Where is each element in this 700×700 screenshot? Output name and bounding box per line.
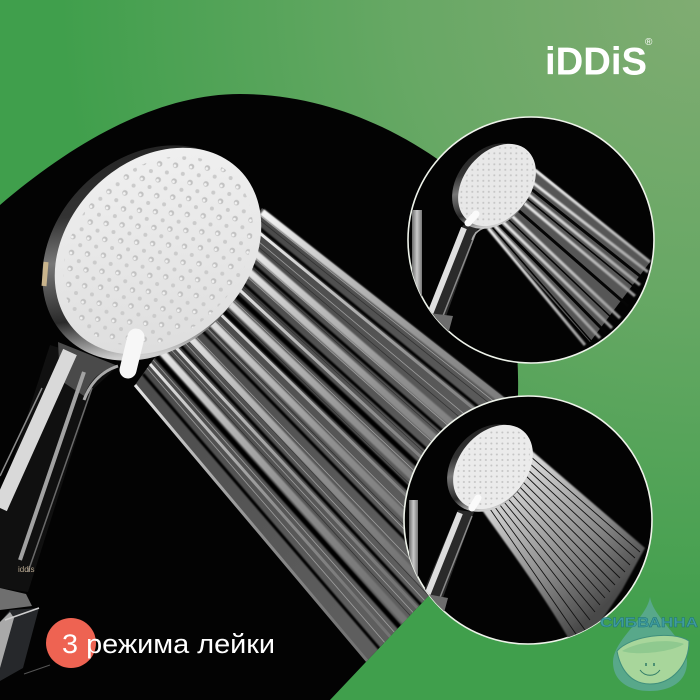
inset circle: jet spray mode [408, 117, 654, 363]
inset handle 2 [420, 510, 474, 606]
registered mark: ® [645, 37, 653, 48]
black main photo panel [0, 94, 518, 700]
inset handle 1 [426, 225, 478, 322]
handle collar [0, 588, 32, 610]
inset head 2 [447, 424, 526, 512]
caption text: 3 режима лейки [62, 629, 275, 659]
caption: 3 modes [46, 618, 275, 668]
inset head 1 [452, 143, 528, 229]
handle tube [0, 345, 118, 592]
tub rim [622, 641, 684, 653]
inset spray 2 [482, 450, 645, 655]
neck shading [58, 342, 118, 396]
vertical bar [409, 500, 418, 577]
nozzle holes [63, 156, 252, 344]
eyes [646, 663, 654, 666]
vertical bar [412, 210, 422, 297]
drop shape [613, 597, 687, 691]
watermark: Sibvanna drop [600, 597, 698, 691]
coral badge [46, 618, 96, 668]
logo: iDDiS: iDDiS [545, 40, 647, 84]
white spray face [54, 148, 262, 354]
chrome rim [42, 146, 232, 360]
mode toggle [128, 337, 136, 370]
main water spray [134, 208, 506, 662]
main shower head [42, 146, 262, 378]
inset spray 1 [488, 168, 650, 345]
brand text: СИБВАННА [600, 615, 698, 630]
inset bracket 2 [428, 594, 448, 612]
fine water streaks [146, 216, 493, 642]
rim reflection [44, 262, 46, 286]
neck arc [84, 366, 118, 400]
inset circle: soft rain spray mode [404, 396, 652, 655]
smile [640, 670, 660, 675]
handle engraved brand: iddis [18, 565, 34, 574]
shower handle [0, 342, 118, 681]
wall bracket [0, 608, 39, 681]
inset bracket 1 [432, 314, 453, 332]
bathtub [617, 635, 689, 684]
